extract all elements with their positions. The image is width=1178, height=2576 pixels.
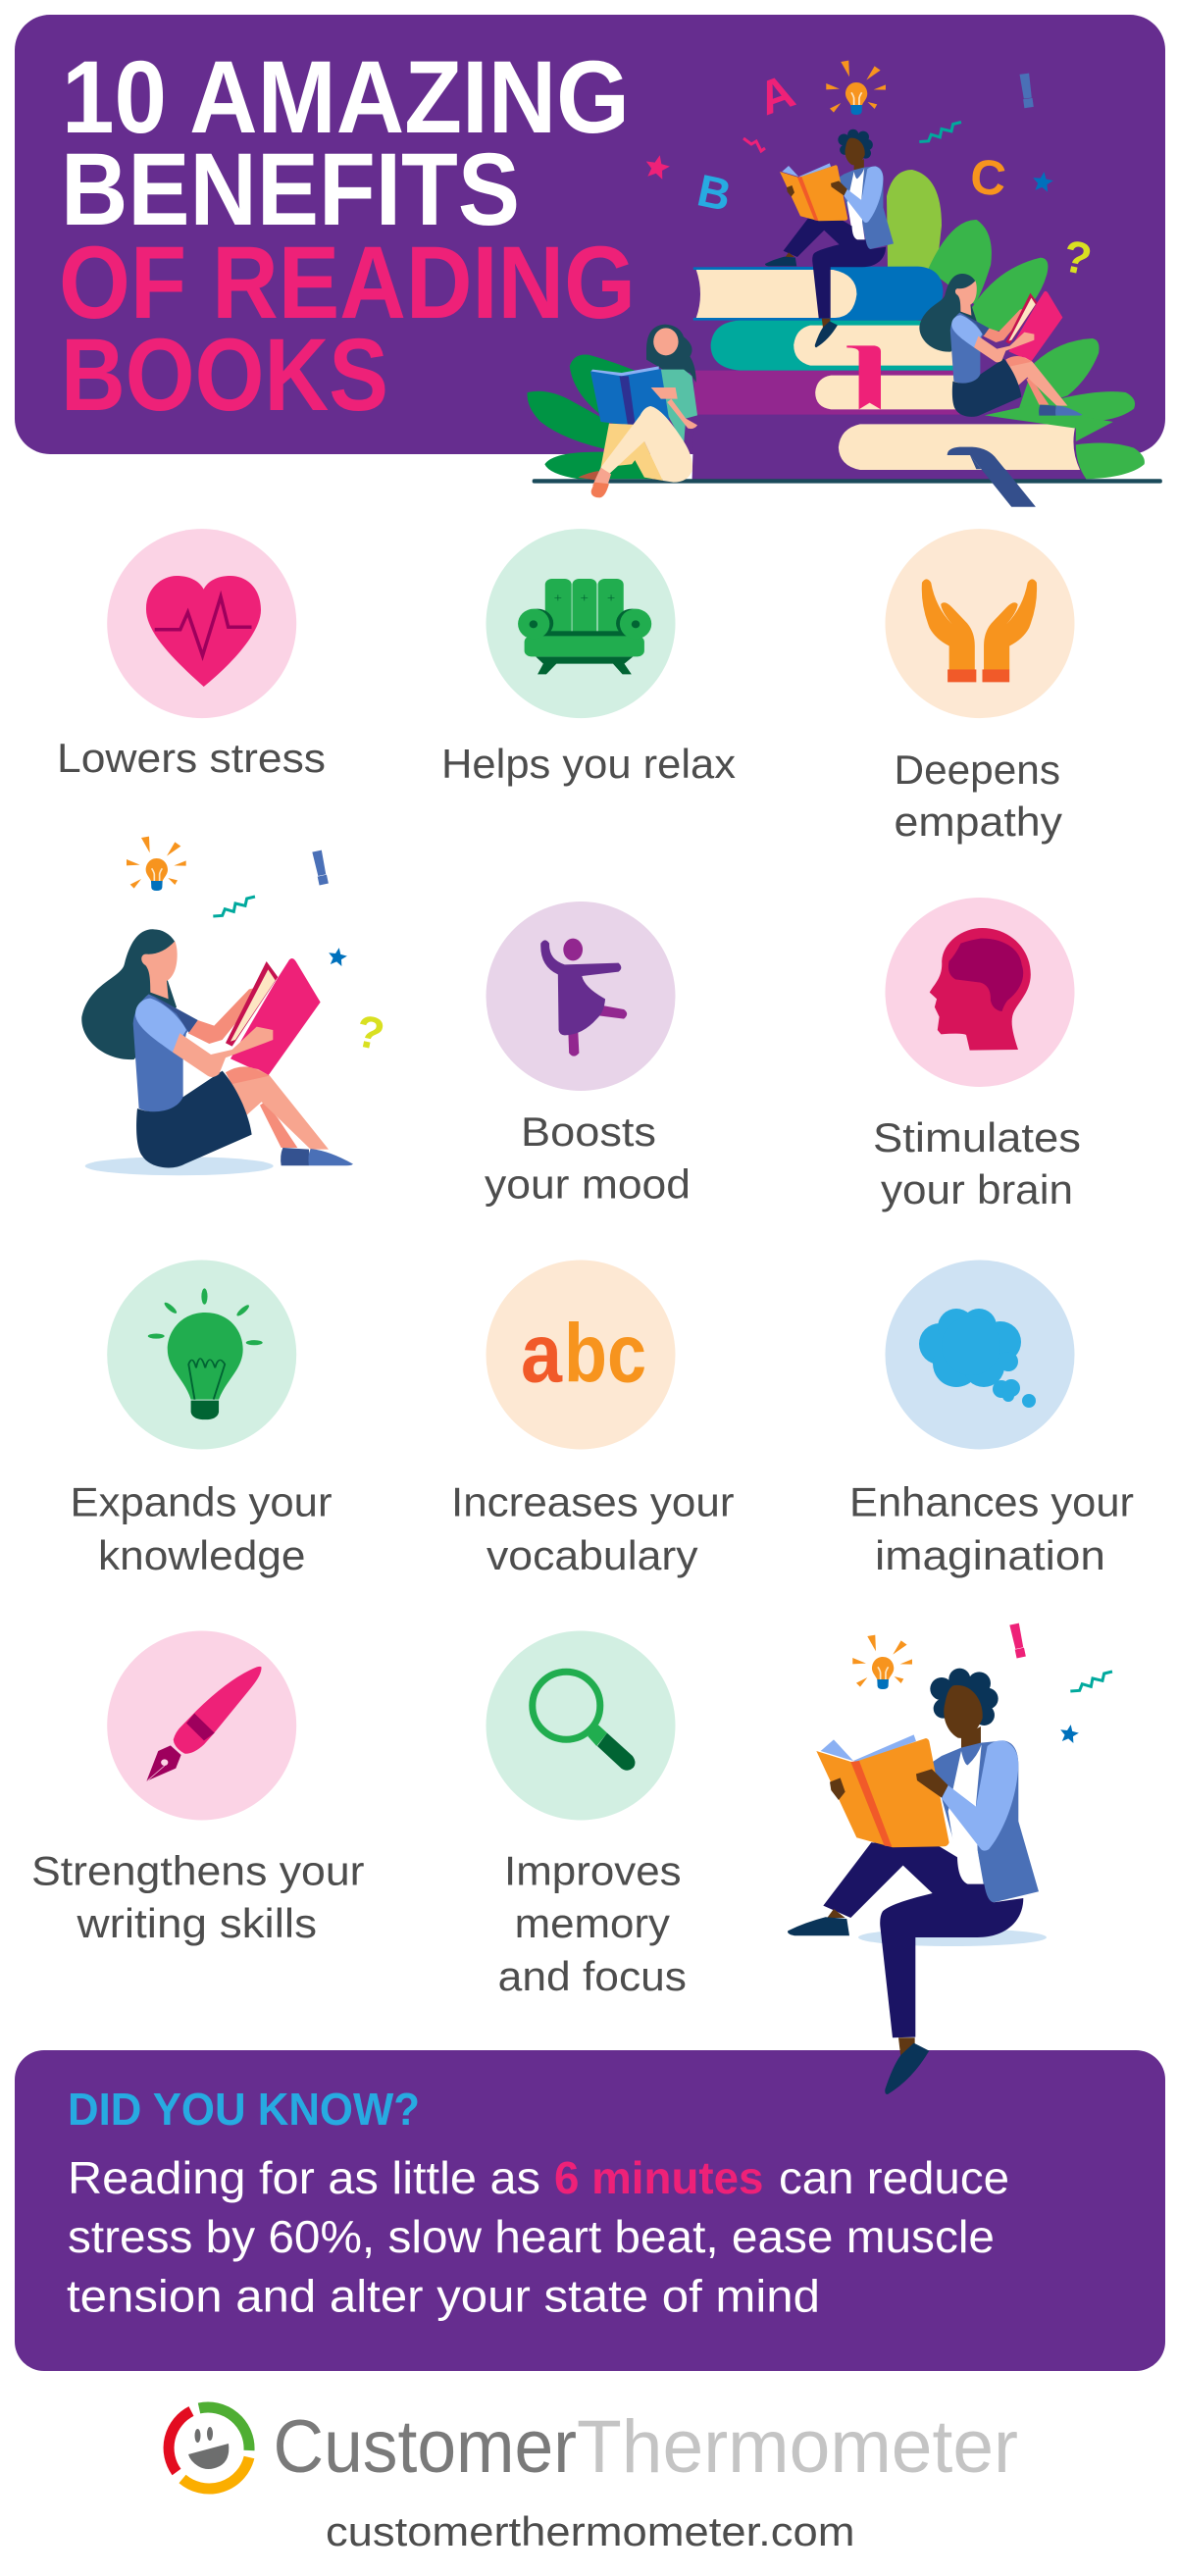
label: Lowers stress <box>57 735 326 781</box>
logo mark <box>169 2407 249 2489</box>
item: increases your vocabulary <box>451 1260 735 1578</box>
icon: fountain pen <box>146 1667 262 1781</box>
illustration: seated woman reading <box>81 837 388 1175</box>
icon: abc: bc <box>564 1308 646 1400</box>
logo: customer thermometer <box>169 2405 1018 2489</box>
icon: sofa <box>518 579 651 674</box>
logo wordmark <box>273 2405 1018 2489</box>
star <box>1058 1724 1080 1744</box>
label <box>849 1479 1134 1578</box>
panel: did you know <box>15 2050 1165 2371</box>
icon: heart <box>146 576 261 687</box>
item: deepens empathy <box>885 529 1075 845</box>
question mark: ? <box>1058 230 1096 285</box>
figure: woman with pink book <box>919 274 1082 417</box>
shadow <box>858 1929 1047 1946</box>
label: your mood <box>485 1161 691 1207</box>
label <box>485 1108 691 1207</box>
icon: thought cloud <box>919 1309 1036 1408</box>
exclamation: ! <box>1016 64 1038 117</box>
icon: magnifying glass <box>533 1672 635 1771</box>
label: Enhances your <box>849 1479 1134 1525</box>
did you know body text: 6 minutes <box>554 2152 763 2203</box>
label <box>71 1479 333 1578</box>
item: enhances your imagination <box>849 1260 1134 1578</box>
blue star <box>1031 171 1054 192</box>
teal zigzag <box>1070 1672 1112 1691</box>
label <box>895 747 1062 845</box>
did you know body text <box>67 2152 1009 2321</box>
label: knowledge <box>98 1532 306 1578</box>
icon: light bulb <box>148 1288 263 1419</box>
icon: hands <box>922 579 1037 682</box>
label: memory <box>515 1900 670 1946</box>
label <box>31 1848 365 1946</box>
shadow <box>85 1157 274 1175</box>
figure <box>788 1669 1039 2094</box>
item: boosts your mood <box>485 902 691 1207</box>
label: vocabulary <box>487 1532 698 1578</box>
icon: abc: a <box>521 1308 563 1400</box>
label <box>873 1114 1081 1212</box>
icon: dancer <box>540 939 627 1056</box>
label: Expands your <box>71 1479 333 1525</box>
label: writing skills <box>76 1900 317 1946</box>
letter B: B <box>693 164 736 221</box>
did you know body text: Reading for as little as <box>68 2152 540 2203</box>
teal zigzag <box>919 122 961 141</box>
figure: man with orange book <box>765 129 894 347</box>
decorations: hero letters and marks <box>643 61 1096 285</box>
label: Helps you relax <box>441 741 736 787</box>
website url: customerthermometer.com <box>326 2508 855 2554</box>
icon: head with brain <box>930 928 1031 1051</box>
did you know heading: DID YOU KNOW? <box>68 2084 420 2135</box>
title: BOOKS <box>61 318 388 433</box>
icon: abc <box>521 1308 646 1400</box>
letter A: A <box>751 66 801 126</box>
item: strengthens your writing skills <box>31 1630 365 1946</box>
star <box>327 947 348 967</box>
question mark: ? <box>351 1005 388 1060</box>
logo wordmark: Thermometer <box>577 2405 1018 2489</box>
title <box>59 40 636 433</box>
pink star <box>643 153 672 180</box>
label: Improves <box>504 1848 682 1893</box>
icon: lightbulb <box>852 1635 912 1689</box>
label: Stimulates <box>873 1114 1081 1160</box>
illustration: hero book stack and readers <box>528 129 1162 507</box>
label: imagination <box>875 1532 1105 1578</box>
panel: header <box>15 15 1165 454</box>
item: improves memory and focus <box>487 1630 687 1999</box>
item: expands your knowledge <box>71 1260 333 1578</box>
exclamation: ! <box>1005 1614 1031 1667</box>
logo wordmark: Customer <box>273 2405 577 2489</box>
label <box>451 1479 735 1578</box>
book stack <box>533 267 1162 507</box>
label: Boosts <box>521 1108 656 1155</box>
icon: lightbulb <box>826 61 886 115</box>
title: OF READING <box>59 226 636 340</box>
did you know body text: can reduce <box>779 2152 1009 2203</box>
figure <box>81 929 353 1167</box>
label: Deepens <box>895 747 1060 793</box>
title: BENEFITS <box>61 132 520 247</box>
figure: woman with blue book <box>578 325 697 497</box>
back leaves <box>528 170 1100 479</box>
did you know body text: stress by 60%, slow heart beat, ease muscle <box>68 2211 995 2262</box>
label: Increases your <box>451 1479 735 1525</box>
did you know body text: tension and alter your state of mind <box>67 2270 820 2321</box>
exclamation: ! <box>308 841 333 894</box>
item: lowers stress <box>57 529 326 781</box>
letter C: C <box>968 149 1008 207</box>
item: stimulates your brain <box>873 898 1081 1212</box>
pink zigzag <box>743 138 765 151</box>
icon: lightbulb <box>127 837 186 891</box>
title: 10 AMAZING <box>62 40 630 155</box>
label: empathy <box>895 799 1062 845</box>
item: helps you relax <box>441 529 736 787</box>
label: and focus <box>498 1953 687 1999</box>
label: your brain <box>881 1166 1073 1212</box>
label: Strengthens your <box>31 1848 365 1893</box>
teal zigzag <box>213 897 255 916</box>
label <box>498 1848 687 1999</box>
illustration: seated man reading <box>788 1614 1112 2094</box>
